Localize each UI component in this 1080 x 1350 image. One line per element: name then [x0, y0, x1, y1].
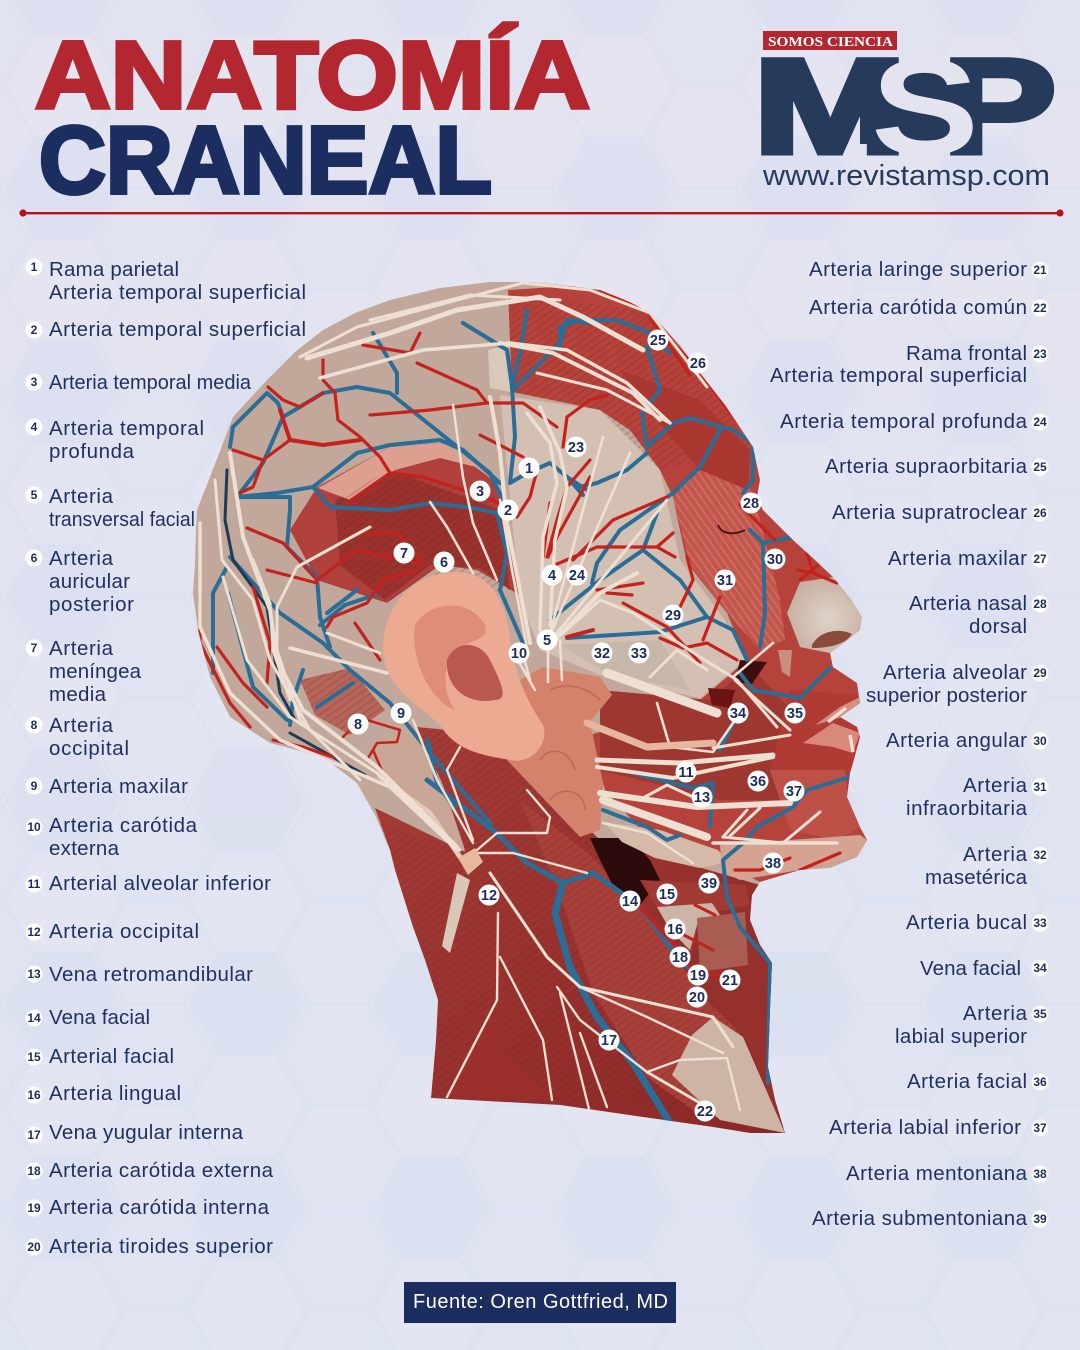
- item 31: infraorbitaria: [906, 797, 1028, 820]
- item 11: 11: [28, 877, 41, 891]
- nose: [787, 577, 862, 653]
- forehead muscle striations: [508, 290, 753, 470]
- item 5: [26, 485, 195, 531]
- hyoid region: [640, 880, 750, 960]
- logo tag: Somos Ciencia: [763, 31, 897, 50]
- cream nerves back of head: [200, 453, 460, 850]
- item 36: Arteria facial: [907, 1070, 1027, 1093]
- item 35: labial superior: [895, 1025, 1027, 1048]
- parotid gland: [507, 667, 612, 837]
- lower lip: [803, 723, 860, 753]
- temporal muscle: [290, 443, 523, 603]
- item 31: Arteria: [963, 774, 1028, 797]
- item 32: 32: [1033, 848, 1047, 862]
- item 32: masetérica: [925, 866, 1028, 889]
- item 14: Vena facial: [49, 1006, 150, 1029]
- numbered markers on the head: 17: [601, 1033, 617, 1049]
- source box: [404, 1282, 676, 1323]
- dark cavity under jaw: [590, 838, 660, 905]
- item 10: 10: [27, 820, 41, 834]
- item 31: 31: [1033, 780, 1047, 794]
- item 24: 24: [1033, 415, 1047, 429]
- chin and mandible edge: [720, 835, 867, 880]
- temple taupe shading: [500, 395, 745, 698]
- item 29: Arteria alveolar: [883, 661, 1027, 684]
- item 7: media: [49, 683, 107, 706]
- numbered markers on the head: 22: [697, 1104, 713, 1120]
- item 2: 2: [31, 323, 38, 337]
- chin muscle shadow: [770, 770, 860, 840]
- neck striation: [380, 728, 604, 1091]
- numbered markers on the head: 6: [440, 555, 448, 571]
- eyelid crease: [718, 525, 745, 533]
- numbered markers on the head: 19: [690, 968, 706, 984]
- item 35: Arteria: [963, 1002, 1028, 1025]
- title line: ANATOMÍA: ANATOMÍA: [35, 22, 590, 129]
- item 29: 29: [1033, 666, 1047, 680]
- item 2: Arteria temporal superficial: [49, 318, 306, 341]
- numbered markers on the head: 23: [568, 440, 584, 456]
- jaw tendon band: [604, 822, 728, 868]
- sternocleidomastoid: [520, 800, 785, 1133]
- item 26: Arteria supratroclear: [832, 501, 1027, 524]
- item 6: auricular: [49, 570, 130, 593]
- item 8: [26, 714, 129, 760]
- cream tape at neck: [442, 873, 470, 953]
- item 25: 25: [1033, 460, 1047, 474]
- item 19: Arteria carótida interna: [49, 1196, 270, 1219]
- cream nerves temporal branches: [430, 397, 777, 727]
- item 26: 26: [1033, 506, 1047, 520]
- item 23: Arteria temporal superficial: [770, 364, 1027, 387]
- item 16: 16: [27, 1088, 41, 1102]
- logo url: www.revistamsp.com: [762, 160, 1050, 192]
- numbered markers on the head: 10: [511, 646, 527, 662]
- orbicularis oculi muscle: [673, 467, 785, 650]
- logo tag: Somos Ciencia: SOMOS CIENCIA: [768, 34, 893, 49]
- upper lip: [815, 697, 860, 725]
- item 10: externa: [49, 837, 120, 860]
- item 5: Arteria: [49, 485, 114, 508]
- item 28: dorsal: [969, 615, 1027, 638]
- item 13: Vena retromandibular: [49, 963, 253, 986]
- numbered markers on the head: 31: [717, 573, 733, 589]
- item 31: [906, 774, 1048, 820]
- nostril: [812, 631, 852, 648]
- cream nerves scalp bundle: [300, 283, 707, 423]
- item 36: 36: [1033, 1075, 1047, 1089]
- item 6: Arteria: [49, 547, 114, 570]
- item 34: Vena facial: [920, 957, 1021, 980]
- source box: Fuente: Oren Gottfried, MD: [413, 1291, 668, 1313]
- item 7: [26, 637, 142, 706]
- item 29: superior posterior: [866, 684, 1027, 707]
- dark vessels at back of the head: [225, 470, 365, 775]
- item 4: Arteria temporal: [49, 417, 204, 440]
- item 20: Arteria tiroides superior: [49, 1235, 273, 1258]
- item 10: Arteria carótida: [49, 814, 198, 837]
- numbered markers on the head: 15: [659, 887, 675, 903]
- logo wordmark: MSP: P: [943, 32, 1056, 182]
- item 30: Arteria angular: [886, 729, 1027, 752]
- item 6: [26, 547, 134, 616]
- cervical plexus node: [458, 848, 483, 875]
- numbered markers on the head: 5: [543, 633, 551, 649]
- item 1: Rama parietal: [49, 258, 179, 281]
- logo wordmark: MSP: S: [871, 31, 979, 183]
- item 23: [770, 342, 1048, 387]
- strap muscle: [697, 912, 748, 972]
- item 37: 37: [1033, 1121, 1047, 1135]
- numbered markers on the head: 18: [672, 950, 688, 966]
- item 5: transversal facial: [49, 508, 195, 531]
- numbered markers on the head: 13: [694, 790, 710, 806]
- item 3: 3: [31, 375, 38, 389]
- occipital muscle fan: [300, 668, 385, 735]
- numbered markers on the head: 28: [743, 496, 759, 512]
- item 20: 20: [27, 1240, 41, 1254]
- item 21: 21: [1033, 263, 1047, 277]
- item 38: 38: [1033, 1167, 1047, 1181]
- scalp base: [190, 275, 880, 1145]
- lower lip highlights: [828, 708, 853, 752]
- item 4: 4: [31, 420, 38, 434]
- item 17: Vena yugular interna: [49, 1121, 244, 1144]
- item 18: Arteria carótida externa: [49, 1159, 274, 1182]
- item 39: Arteria submentoniana: [812, 1207, 1028, 1230]
- item 27: Arteria maxilar: [888, 547, 1027, 570]
- item 1: Arteria temporal superficial: [49, 281, 306, 304]
- item 11: Arterial alveolar inferior: [49, 872, 271, 895]
- item 29: [866, 661, 1048, 707]
- item 4: profunda: [49, 440, 135, 463]
- item 30: 30: [1033, 734, 1047, 748]
- right legend: [770, 258, 1048, 1230]
- item 17: 17: [27, 1128, 41, 1142]
- item 37: Arteria labial inferior: [829, 1116, 1021, 1139]
- masseter and jaw muscle: [600, 674, 786, 800]
- item 6: 6: [31, 551, 38, 565]
- lips region: [770, 690, 860, 796]
- item 14: 14: [27, 1011, 41, 1025]
- title: [35, 22, 590, 214]
- item 15: Arterial facial: [49, 1045, 174, 1068]
- numbered markers on the head: 39: [701, 876, 717, 892]
- numbered markers on the head: 1: [525, 461, 533, 477]
- numbered markers on the head: 26: [690, 356, 706, 372]
- dark recess below the cheek: [735, 660, 767, 684]
- numbered markers on the head: 29: [665, 608, 681, 624]
- numbered markers on the head: 25: [650, 333, 666, 349]
- numbered markers on the head: 4: [548, 568, 556, 584]
- item 28: [909, 592, 1048, 638]
- red arteries: [200, 290, 840, 975]
- numbered markers on the head: 2: [504, 503, 512, 519]
- numbered markers on the head: 38: [765, 856, 781, 872]
- cream nerves neck: [380, 720, 740, 1113]
- neck muscles: [375, 727, 785, 1133]
- numbered markers on the head: 33: [631, 646, 647, 662]
- lower front neck: [695, 920, 785, 1133]
- item 13: 13: [27, 967, 41, 981]
- item 12: 12: [27, 925, 41, 939]
- item 33: 33: [1033, 916, 1047, 930]
- numbered markers on the head: 7: [400, 546, 408, 562]
- item 8: Arteria: [49, 714, 114, 737]
- item 16: Arteria lingual: [49, 1082, 181, 1105]
- item 1: 1: [31, 260, 38, 274]
- left legend: [26, 258, 306, 1258]
- ear: [383, 572, 544, 761]
- logo: MSP magazine: [753, 31, 1056, 192]
- numbered markers on the head: 20: [689, 990, 705, 1006]
- item 28: Arteria nasal: [909, 592, 1027, 615]
- item 6: posterior: [49, 593, 134, 616]
- item 32: Arteria: [963, 843, 1028, 866]
- title line: CRANEAL: CRANEAL: [39, 107, 492, 214]
- item 35: [895, 1002, 1048, 1048]
- numbered markers on the head: [348, 330, 806, 1122]
- item 4: [26, 417, 204, 463]
- numbered markers on the head: 14: [622, 894, 638, 910]
- item 12: Arteria occipital: [49, 920, 199, 943]
- face muscles: [508, 286, 867, 882]
- numbered markers on the head: 24: [569, 568, 585, 584]
- numbered markers on the head: 21: [722, 973, 738, 989]
- forehead dark shade: [620, 370, 750, 490]
- logo wordmark: MSP: M: [753, 32, 907, 182]
- item 25: Arteria supraorbitaria: [825, 455, 1028, 478]
- blue veins: [213, 310, 850, 1123]
- item 1: [26, 258, 306, 304]
- item 7: Arteria: [49, 637, 114, 660]
- item 35: 35: [1033, 1007, 1047, 1021]
- numbered markers on the head: 34: [730, 706, 746, 722]
- parietal tendon fan: [488, 345, 510, 392]
- item 21: Arteria laringe superior: [809, 258, 1027, 281]
- cream nerves facial bundle: [587, 650, 837, 863]
- item 10: [26, 814, 198, 860]
- item 22: 22: [1033, 301, 1047, 315]
- item 9: 9: [31, 779, 38, 793]
- numbered markers on the head: 36: [750, 774, 766, 790]
- numbered markers on the head: 11: [678, 765, 694, 781]
- item 27: 27: [1033, 552, 1047, 566]
- neck tendon pink: [417, 727, 465, 850]
- item 7: 7: [31, 641, 38, 655]
- numbered markers on the head: 12: [481, 888, 497, 904]
- item 9: Arteria maxilar: [49, 775, 188, 798]
- item 22: Arteria carótida común: [809, 296, 1027, 319]
- numbered markers on the head: 30: [767, 552, 783, 568]
- numbered markers on the head: 16: [667, 922, 683, 938]
- item 34: 34: [1033, 961, 1047, 975]
- cheek gland gray: [560, 640, 690, 690]
- numbered markers on the head: 37: [786, 784, 802, 800]
- item 8: occipital: [49, 737, 129, 760]
- item 38: Arteria mentoniana: [846, 1162, 1028, 1185]
- head anatomy illustration: [190, 275, 880, 1145]
- item 28: 28: [1033, 597, 1047, 611]
- parotid lobules: [540, 686, 600, 810]
- item 24: Arteria temporal profunda: [780, 410, 1028, 433]
- logo wordmark: MSP: [753, 31, 1056, 183]
- nose side: [778, 650, 792, 677]
- numbered markers on the head: 3: [476, 484, 484, 500]
- numbered markers on the head: 35: [787, 706, 803, 722]
- neck back triangle: [451, 1006, 549, 1100]
- item 19: 19: [27, 1201, 41, 1215]
- numbered markers on the head: 8: [354, 717, 362, 733]
- item 32: [925, 843, 1048, 889]
- red divider: [19, 209, 1064, 217]
- item 18: 18: [27, 1164, 41, 1178]
- numbered markers on the head: 32: [594, 646, 610, 662]
- item 3: Arteria temporal media: [49, 371, 252, 394]
- item 7: meníngea: [49, 660, 142, 683]
- item 8: 8: [31, 718, 38, 732]
- sternal tendon: [672, 1017, 785, 1133]
- item 39: 39: [1033, 1212, 1047, 1226]
- item 23: 23: [1033, 347, 1047, 361]
- item 15: 15: [27, 1050, 41, 1064]
- numbered markers on the head: 9: [397, 706, 405, 722]
- item 33: Arteria bucal: [906, 911, 1027, 934]
- item 5: 5: [31, 488, 38, 502]
- item 23: Rama frontal: [906, 342, 1027, 365]
